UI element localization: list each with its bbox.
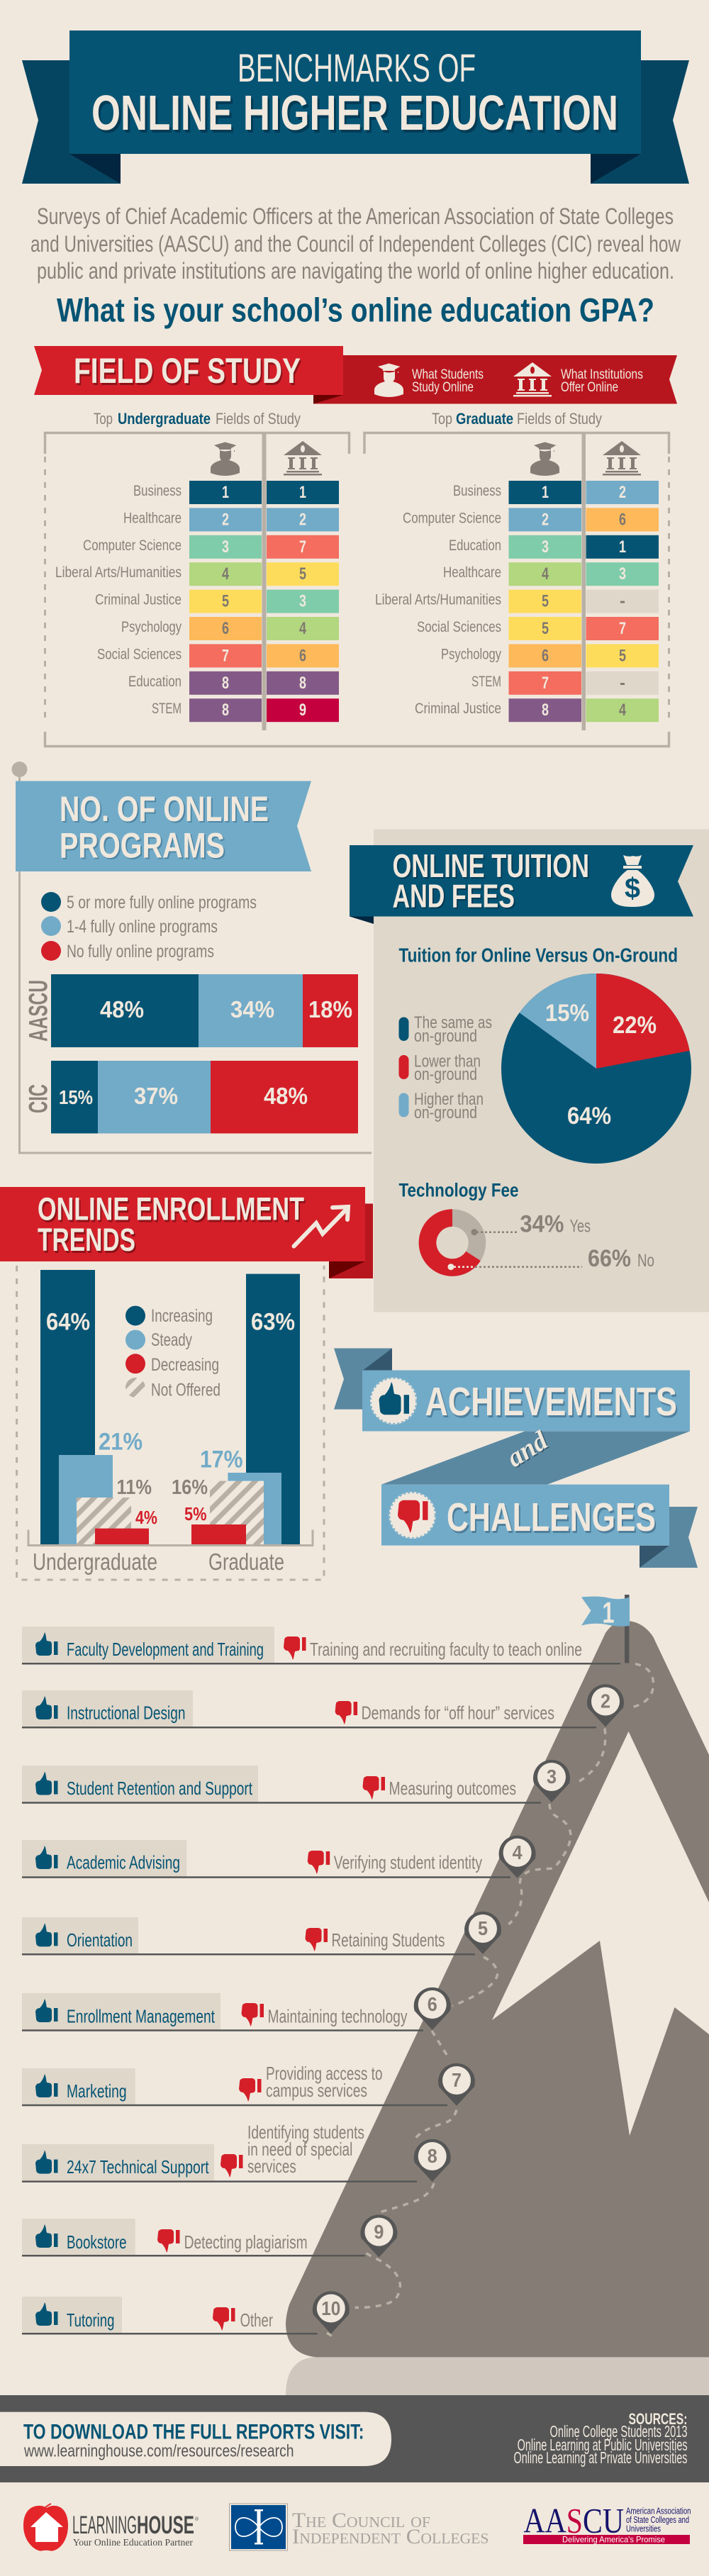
row 6: Maintaining technology [268, 2006, 407, 2027]
stacked bar: CIC: CIC [24, 1084, 52, 1113]
title ribbon [22, 30, 689, 184]
achievements band [362, 1370, 690, 1431]
undergraduate ranks: 3 [222, 537, 229, 557]
undergraduate ranks: 1 [299, 483, 306, 502]
row 4 [22, 1840, 510, 1878]
bars: graduate [191, 1274, 300, 1544]
row 6: Enrollment Management [67, 2006, 216, 2027]
programs heading: NO. OF ONLINE [60, 789, 269, 829]
graduate labels: Education [449, 537, 501, 554]
programs legend: 1-4 fully online programs [67, 917, 218, 937]
donut chart [419, 1209, 654, 1276]
marker 4: 4 [513, 1841, 523, 1863]
achievements and challenges banner [334, 1349, 698, 1568]
axis labels [33, 1549, 284, 1575]
panel: online enrollment trends [0, 1187, 373, 1580]
undergraduate ranks: 3 [299, 592, 306, 611]
row 6 [22, 1993, 423, 2031]
row 10 [22, 2297, 318, 2334]
row 3: Measuring outcomes [389, 1778, 516, 1799]
panel: tuition background [374, 830, 709, 1312]
graduate ranks [542, 483, 626, 720]
undergraduate labels: Computer Science [83, 537, 182, 554]
icon: money bag [611, 855, 654, 907]
legend: what students study [412, 367, 484, 395]
undergraduate ranks: 8 [222, 701, 229, 720]
icon: money bag: $ [625, 873, 640, 904]
marker 8 [414, 2139, 451, 2182]
bar values: 4% [135, 1507, 157, 1528]
undergraduate ranks: 5 [222, 592, 229, 611]
marker 10: 10 [321, 2297, 340, 2319]
enrollment legend: Not Offered [151, 1380, 220, 1400]
marker 7 [438, 2063, 475, 2106]
undergraduate labels: Social Sciences [97, 646, 182, 662]
legend: what students study: Study Online [412, 380, 474, 395]
undergraduate ranks [222, 483, 306, 720]
bar values: 63% [251, 1309, 295, 1336]
axis bracket [28, 1530, 313, 1546]
marker 3: 3 [547, 1766, 557, 1788]
table frames [45, 433, 669, 746]
graduate ranks: - [620, 592, 625, 611]
graduate ranks: 5 [619, 646, 626, 665]
and: and [502, 1425, 554, 1473]
bar values: 64% [46, 1309, 90, 1336]
row 5: Orientation [67, 1929, 133, 1951]
bar values: 16% [172, 1476, 208, 1499]
bars: undergraduate [40, 1270, 149, 1544]
logo: council of independent colleges: Independent Colleges [292, 2525, 489, 2548]
tuition legend: Higher than [414, 1090, 484, 1109]
programs legend [41, 892, 257, 961]
row 5: Retaining Students [332, 1929, 445, 1951]
bar values: 21% [99, 1429, 143, 1456]
mountain body [286, 1621, 709, 2357]
logo: council of independent colleges: The Council of [292, 2509, 430, 2532]
enrollment heading: TRENDS [38, 1222, 135, 1258]
graduate ranks: 6 [619, 510, 626, 529]
graduate labels: Healthcare [443, 564, 501, 581]
logo: AASCU: Universities [626, 2524, 661, 2534]
row 7 [22, 2063, 447, 2106]
tuition legend: on-ground [414, 1103, 477, 1122]
donut chart: 66% [588, 1245, 631, 1272]
technology fee heading: Technology Fee [398, 1180, 519, 1201]
graduate ranks: 7 [619, 619, 626, 638]
row 10: Other [240, 2309, 273, 2331]
flag marker 1 [581, 1595, 630, 1663]
logo: learning house [23, 2504, 199, 2551]
graduate ranks: 5 [542, 619, 549, 638]
logo: learning house: Your Online Education Partner [73, 2538, 193, 2548]
table headings: Top [432, 410, 452, 428]
row 1: Faculty Development and Training [67, 1639, 264, 1660]
stacked bar: CIC [24, 1061, 358, 1133]
logo: AASCU: of State Colleges and [626, 2515, 689, 2525]
undergraduate ranks: 8 [299, 674, 306, 693]
logo: council of independent colleges [230, 2504, 489, 2550]
legend: what institutions offer [561, 367, 643, 395]
tuition heading: AND FEES [393, 878, 515, 915]
marker 3 [533, 1760, 570, 1802]
undergraduate divider [262, 433, 267, 730]
enrollment heading [38, 1191, 304, 1258]
marker 8: 8 [428, 2145, 437, 2167]
icon: institution column [603, 441, 641, 475]
donut chart: No [637, 1251, 654, 1271]
field of study ribbon [34, 346, 677, 404]
undergraduate labels: Education [128, 674, 182, 690]
undergraduate ranks: 8 [222, 674, 229, 693]
graduate labels: Criminal Justice [415, 701, 501, 717]
row 7: Marketing [67, 2080, 127, 2102]
row 3 [22, 1766, 541, 1804]
marker 2: 2 [601, 1690, 610, 1712]
enrollment legend: Increasing [151, 1306, 213, 1326]
undergraduate ranks: 7 [299, 537, 306, 557]
stacked bar: AASCU: AASCU [24, 980, 52, 1042]
undergraduate labels: Healthcare [123, 510, 182, 526]
table headings: Fields of Study [517, 410, 602, 428]
stacked bar: AASCU: 18% [308, 996, 352, 1022]
programs heading: PROGRAMS [60, 825, 225, 865]
mountain inner cut [492, 1732, 709, 2136]
undergraduate ranks: 2 [299, 510, 306, 529]
row 5 [22, 1917, 475, 1956]
undergraduate ranks: 7 [222, 646, 229, 665]
icon: student column [530, 442, 559, 476]
marker 6: 6 [428, 1993, 437, 2015]
stacked bar: AASCU: 48% [100, 996, 144, 1022]
row 10: Tutoring [67, 2309, 114, 2331]
flag marker 1: 1 [603, 1595, 614, 1629]
logo: learning house: ® [195, 2516, 199, 2522]
stacked bar: AASCU: 34% [230, 996, 274, 1022]
undergraduate ranks: 5 [299, 564, 306, 584]
field of study heading: FIELD OF STUDY [74, 351, 301, 391]
marker 10 [313, 2291, 350, 2334]
tuition ribbon [350, 845, 693, 924]
legend: what institutions offer: What Institutions [561, 367, 643, 382]
download callout: www.learninghouse.com/resources/research [23, 2441, 294, 2460]
graduate cells [509, 481, 659, 722]
undergraduate labels [55, 483, 182, 717]
undergraduate labels: Liberal Arts/Humanities [55, 564, 182, 581]
icon: institution column [284, 441, 322, 475]
pie chart [501, 974, 691, 1164]
row 9: Detecting plagiarism [184, 2231, 308, 2253]
logo: learning house: HOUSE [137, 2511, 194, 2539]
icon: institution [513, 362, 552, 397]
undergraduate table [55, 433, 339, 730]
row 4: Verifying student identity [334, 1852, 482, 1873]
undergraduate ranks: 6 [299, 646, 306, 665]
undergraduate labels: Psychology [121, 619, 182, 635]
logo: AASCU: Delivering America's Promise [562, 2534, 665, 2544]
graduate labels: Social Sciences [417, 619, 501, 635]
panel: number of online programs [11, 762, 372, 1153]
row 2: Instructional Design [67, 1702, 186, 1723]
icon: rising arrow [294, 1207, 348, 1247]
axis labels: Graduate [208, 1549, 284, 1575]
marker 9: 9 [374, 2221, 384, 2243]
undergraduate ranks: 1 [222, 483, 229, 502]
row 7: campus services [266, 2080, 367, 2101]
row 9: Bookstore [67, 2231, 127, 2253]
table headings: Fields of Study [216, 410, 301, 428]
undergraduate ranks: 6 [222, 619, 229, 638]
bar values: 5% [184, 1503, 207, 1524]
logo: learning house: LEARNING [72, 2511, 137, 2539]
graduate ranks: 5 [542, 592, 549, 611]
graduate labels: Psychology [441, 646, 501, 662]
enrollment legend [125, 1306, 220, 1400]
row 8 [22, 2121, 417, 2182]
enrollment legend: Steady [151, 1330, 192, 1350]
marker 7: 7 [452, 2069, 462, 2091]
graduate ranks: 2 [542, 510, 549, 529]
graduate ranks: 8 [542, 701, 549, 720]
footer band [0, 2395, 709, 2482]
tuition legend [398, 1013, 492, 1122]
row 9 [22, 2219, 365, 2256]
tuition legend: on-ground [414, 1027, 477, 1046]
programs legend: 5 or more fully online programs [67, 893, 257, 913]
marker 4 [499, 1836, 536, 1878]
graduate ranks: 7 [542, 674, 549, 693]
row 8: in need of special [247, 2139, 352, 2160]
tuition heading: ONLINE TUITION [393, 847, 589, 884]
marker 9 [360, 2214, 397, 2258]
graduate ranks: 4 [619, 701, 626, 720]
tuition legend: Lower than [414, 1052, 481, 1071]
download callout: TO DOWNLOAD THE FULL REPORTS VISIT: [23, 2421, 364, 2443]
enrollment legend: Decreasing [151, 1355, 219, 1375]
graduate ranks: - [620, 674, 625, 693]
stacked bar: CIC: 15% [59, 1086, 93, 1108]
legend: what institutions offer: Offer Online [561, 380, 618, 395]
programs heading [60, 789, 269, 865]
marker 2 [587, 1684, 624, 1727]
undergraduate ranks: 4 [222, 564, 229, 584]
marker 6 [414, 1987, 451, 2030]
programs ribbon [16, 781, 311, 871]
programs legend: No fully online programs [67, 942, 214, 961]
stacked bar: CIC: 48% [264, 1083, 308, 1109]
graduate ranks: 4 [542, 564, 549, 584]
axis labels: Undergraduate [33, 1549, 157, 1575]
marker 5 [464, 1912, 501, 1954]
tuition legend: The same as [414, 1013, 492, 1032]
panel: online tuition and fees [350, 845, 693, 1276]
table headings: Top [94, 410, 113, 428]
enrollment ribbon [0, 1187, 373, 1278]
graduate ranks: 1 [619, 537, 626, 557]
sources [513, 2410, 688, 2467]
donut chart: 34% [520, 1211, 564, 1238]
graduate labels [375, 483, 501, 717]
bar values: 11% [116, 1476, 152, 1499]
undergraduate ranks: 2 [222, 510, 229, 529]
row 4: Academic Advising [67, 1852, 180, 1873]
download callout [0, 2412, 391, 2466]
icon: student [374, 363, 403, 397]
row 1: Training and recruiting faculty to teach online [310, 1639, 582, 1660]
logo: AASCU: AASCU [523, 2501, 624, 2541]
tuition heading [393, 847, 589, 915]
row 2 [22, 1690, 596, 1729]
tuition legend: on-ground [414, 1065, 477, 1084]
graduate labels: Business [453, 483, 501, 499]
sources: SOURCES: [628, 2410, 688, 2428]
intro paragraph [30, 203, 681, 284]
logo: AASCU [523, 2501, 691, 2544]
undergraduate ranks: 9 [299, 701, 306, 720]
row 2: Demands for “off hour” services [362, 1702, 554, 1723]
achievements badge [370, 1378, 417, 1424]
stacked bar: CIC: 37% [134, 1083, 178, 1109]
graduate ranks: 3 [619, 564, 626, 584]
challenges band [381, 1485, 669, 1546]
graduate ranks: 6 [542, 646, 549, 665]
table headings [94, 410, 602, 428]
row 3: Student Retention and Support [67, 1778, 253, 1799]
dashed frame [17, 1266, 324, 1580]
bar values [46, 1309, 295, 1528]
undergraduate labels: STEM [152, 701, 182, 717]
title line 1: BENCHMARKS OF [238, 45, 476, 90]
table headings: Undergraduate [118, 410, 211, 428]
graduate labels: Computer Science [403, 510, 501, 526]
challenges badge [389, 1492, 436, 1539]
graduate divider [581, 433, 586, 730]
mountain base shadow [286, 2357, 709, 2395]
undergraduate labels: Criminal Justice [95, 592, 182, 608]
stacked bar: AASCU [24, 974, 358, 1047]
graduate ranks: 3 [542, 537, 549, 557]
graduate ranks: 1 [542, 483, 549, 502]
logo: AASCU: American Association [626, 2507, 691, 2516]
undergraduate labels: Business [133, 483, 182, 499]
icon: student column [211, 442, 240, 476]
table headings: Graduate [456, 410, 513, 428]
graduate ranks: 2 [619, 483, 626, 502]
mountain illustration [286, 1621, 709, 2395]
row 1 [22, 1627, 620, 1665]
enrollment heading: ONLINE ENROLLMENT [38, 1191, 304, 1227]
row 8: services [247, 2156, 296, 2177]
donut chart: Yes [570, 1217, 591, 1237]
graduate labels: Liberal Arts/Humanities [375, 592, 501, 608]
pie chart: 64% [567, 1103, 611, 1130]
bar values: 17% [200, 1446, 242, 1473]
graduate table [375, 433, 659, 730]
row 7: Providing access to [266, 2063, 383, 2084]
row 8: Identifying students [247, 2121, 364, 2143]
legend: what students study: What Students [412, 367, 484, 382]
pie chart: 22% [613, 1012, 657, 1039]
undergraduate cells [189, 481, 339, 722]
pin and frame line [11, 762, 372, 1153]
row 8: 24x7 Technical Support [67, 2156, 209, 2178]
graduate labels: STEM [471, 674, 501, 690]
undergraduate ranks: 4 [299, 619, 306, 638]
ribbon tails and connector [334, 1349, 698, 1568]
marker 5: 5 [478, 1917, 488, 1939]
pie chart: 15% [545, 1000, 589, 1027]
dashed trail [327, 1664, 654, 2337]
